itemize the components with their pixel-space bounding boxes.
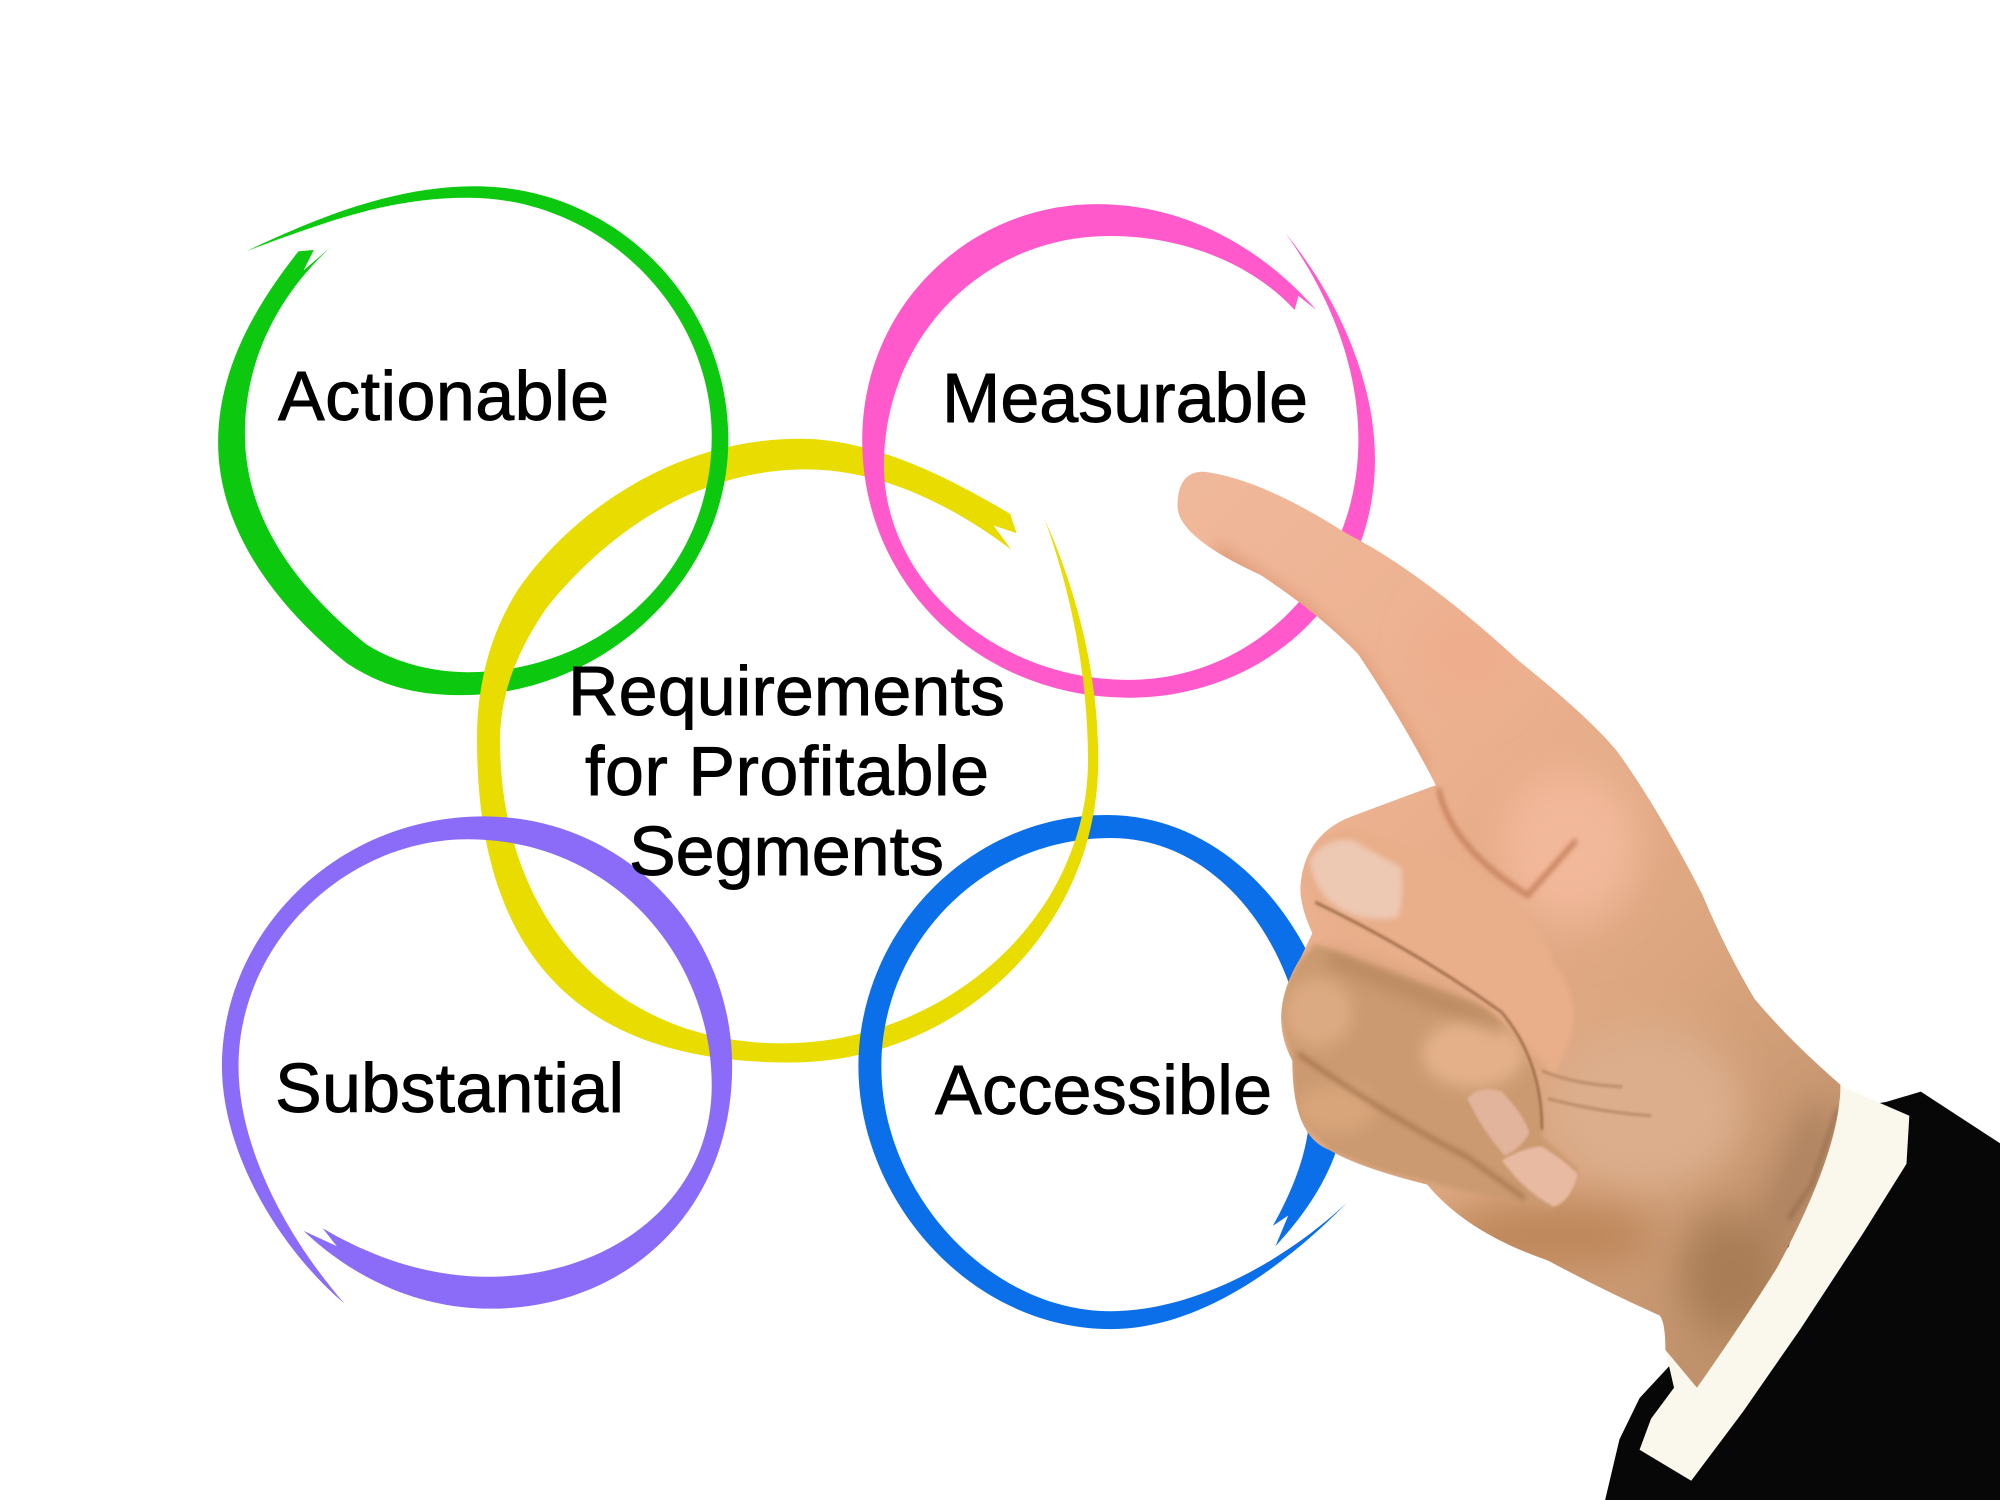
ring: blue accessible — [858, 815, 1347, 1329]
curled fingers — [1279, 943, 1579, 1209]
label: Measurable: Measurable — [942, 359, 1308, 437]
thumb nail — [1310, 840, 1402, 919]
thumb — [1301, 864, 1572, 1071]
jacket sleeve — [1605, 1092, 2000, 1500]
label: Actionable: Actionable — [278, 357, 609, 435]
ring: yellow centre — [477, 439, 1098, 1062]
ring: pink measurable — [862, 204, 1375, 698]
hand — [1178, 472, 1840, 1388]
centre label: Requirements for Profitable Segments — [568, 652, 1005, 890]
centre label: Requirements for Profitable Segments: Requirements — [568, 652, 1005, 730]
diagram: requirements for profitable segments — [218, 186, 2000, 1500]
ring: purple substantial — [222, 816, 732, 1309]
centre label: Requirements for Profitable Segments: for Profitable — [585, 732, 989, 810]
centre label: Requirements for Profitable Segments: Segments — [629, 812, 944, 890]
ring: green actionable — [218, 186, 728, 695]
crease lines — [1315, 902, 1542, 1129]
finger nails — [1467, 1089, 1529, 1156]
pointing hand with suit sleeve — [1157, 454, 2000, 1500]
shirt cuff — [1640, 1085, 1909, 1481]
label: Substantial: Substantial — [275, 1049, 624, 1127]
label: Accessible: Accessible — [935, 1051, 1272, 1129]
